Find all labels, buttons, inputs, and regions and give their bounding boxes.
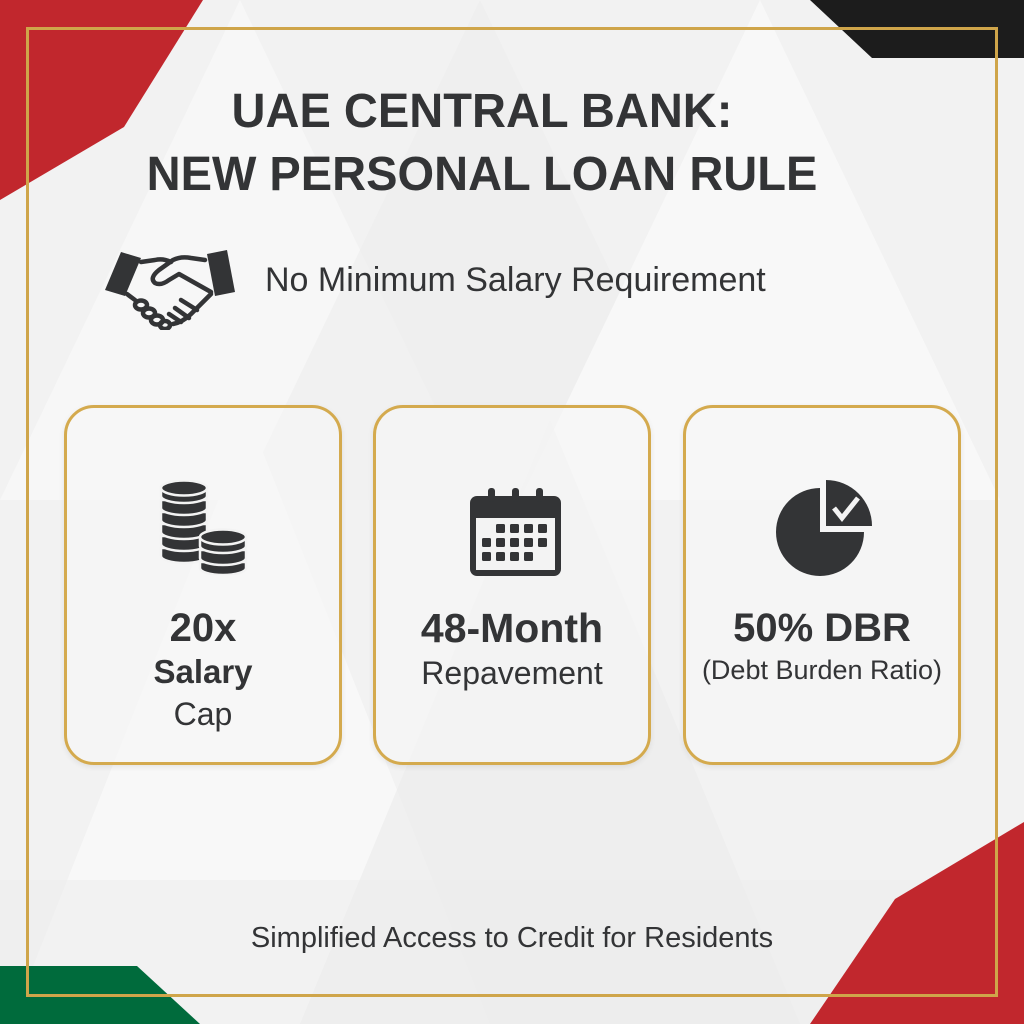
value: 20x salary cap: Salary <box>153 653 253 690</box>
value: 20x salary cap: Cap <box>174 696 232 732</box>
corner: green bottom-left <box>0 966 200 1024</box>
corner: black top-right <box>810 0 1024 58</box>
value: 20x salary cap: 20x <box>170 606 236 650</box>
card: DBR <box>683 405 961 765</box>
subtitle: no minimum salary: No Minimum Salary Requirement <box>265 261 766 299</box>
value: 50% DBR <box>702 606 942 685</box>
corner: red top-left <box>0 0 203 200</box>
icon: calendar <box>470 488 561 576</box>
title <box>147 85 817 201</box>
title: UAE CENTRAL BANK: <box>232 85 732 138</box>
value: 48-month repayment: 48-Month <box>421 605 603 651</box>
value: 48-month repayment: Repavement <box>421 655 603 691</box>
card: salary cap <box>64 405 342 765</box>
value: 20x salary cap <box>153 606 253 732</box>
icon: handshake <box>105 250 235 330</box>
value: 50% DBR: 50% DBR <box>733 606 911 650</box>
icon: pie chart with check <box>776 480 872 576</box>
corner: red bottom-right <box>810 822 1024 1024</box>
card: repayment <box>373 405 651 765</box>
value: 48-month repayment <box>421 605 603 691</box>
icon: coins <box>162 482 245 574</box>
footer text: Simplified Access to Credit for Residents <box>251 922 773 954</box>
title: NEW PERSONAL LOAN RULE <box>147 148 817 201</box>
value: 50% DBR: (Debt Burden Ratio) <box>702 655 942 685</box>
